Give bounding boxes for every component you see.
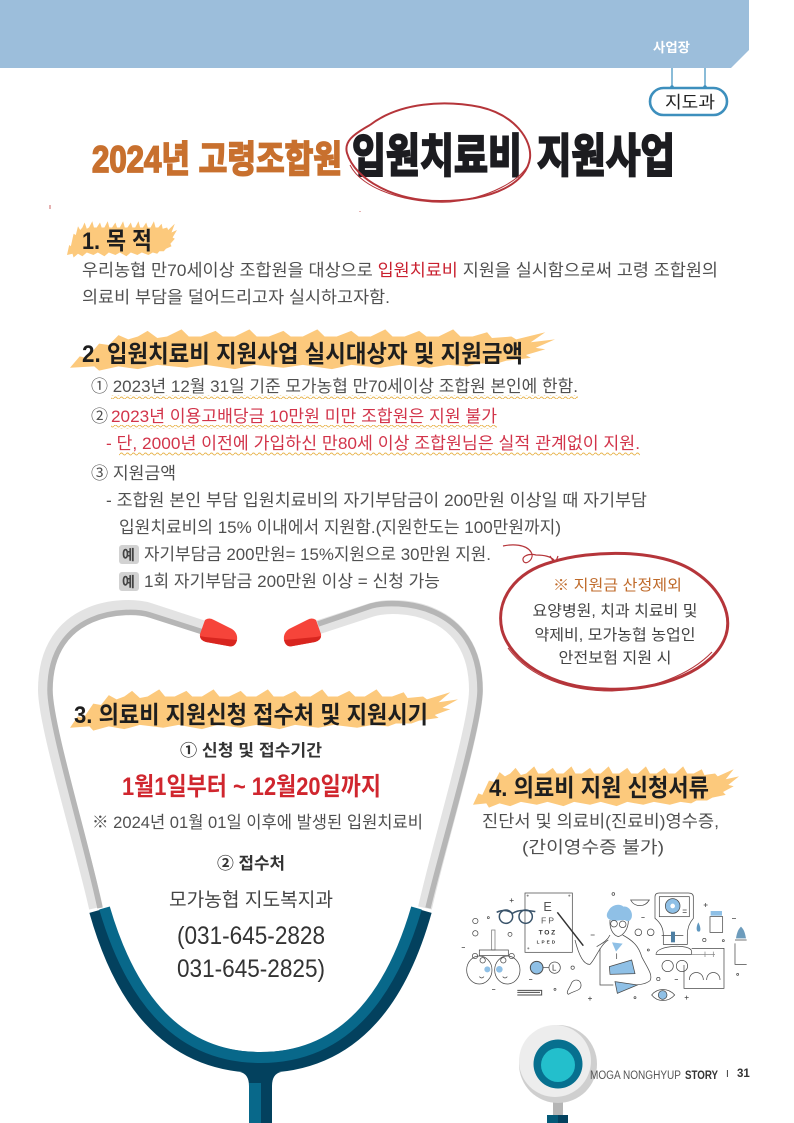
example 2: 1회 자기부담금 200만원 이상 = 신청 가능 <box>144 572 440 591</box>
section 4 heading <box>473 766 739 808</box>
section 1 body: 우리농협 만70세이상 조합원을 대상으로 입원치료비 지원을 실시함으로써 고령 조합원의 <box>82 261 718 280</box>
doctor <box>597 905 651 993</box>
example 1: 예 <box>122 547 135 563</box>
section 3 period: ① 신청 및 접수기간 <box>180 741 322 760</box>
example 2: 예 <box>122 574 135 590</box>
footer text: MOGA NONGHYUP <box>590 1070 681 1082</box>
title <box>92 130 675 182</box>
eye chart: TOZ <box>539 929 557 936</box>
illustration right part <box>597 893 747 1000</box>
section 4 heading: 4. 의료비 지원 신청서류 <box>489 775 709 802</box>
callout: exclusions: 안전보험 지원 시 <box>558 649 672 667</box>
section 4 body: 진단서 및 의료비(진료비)영수증, <box>482 812 719 831</box>
section 3 contact: (031-645-2828 <box>177 922 325 950</box>
lens icons: L <box>552 964 557 973</box>
magnifier decoration <box>519 1025 597 1123</box>
specks <box>50 205 360 212</box>
right ear tip <box>284 618 321 646</box>
eye chart: LPED <box>537 940 557 945</box>
left tube <box>45 607 205 908</box>
eye chart <box>525 893 583 952</box>
section 3 heading <box>70 689 458 731</box>
title: 2024년 고령조합원 <box>92 139 342 180</box>
department pill: 지도과 <box>665 93 715 112</box>
bottles, lens and drops <box>631 900 747 964</box>
section 1 heading <box>67 221 177 258</box>
item 3: ③ 지원금액 <box>91 464 176 483</box>
pointing arm <box>575 940 608 964</box>
banner label: 사업장 <box>653 40 690 55</box>
callout: exclusions <box>501 553 728 691</box>
title: 입원치료비 <box>352 130 522 182</box>
section 2 heading: 2. 입원치료비 지원사업 실시대상자 및 지원금액 <box>82 341 523 368</box>
title: 지원사업 <box>537 130 675 182</box>
item 3: 입원치료비의 15% 이내에서 지원함.(지원한도는 100만원까지) <box>119 518 561 537</box>
item 1: ① 2023년 12월 31일 기준 모가농협 만70세이상 조합원 본인에 한함. <box>91 377 578 396</box>
section 3 heading: 3. 의료비 지원신청 접수처 및 지원시기 <box>74 702 428 729</box>
section 1 body <box>82 261 718 307</box>
item 2: - 단, 2000년 이전에 가입하신 만80세 이상 조합원님은 실적 관계없이 지원. <box>106 434 640 453</box>
item 3: - 조합원 본인 부담 입원치료비의 자기부담금이 200만원 이상일 때 자기부담 <box>106 491 647 510</box>
section 2 heading <box>70 329 555 371</box>
section 1 body: 의료비 부담을 덜어드리고자 실시하고자함. <box>82 288 390 307</box>
section 4 body: (간이영수증 불가) <box>522 838 664 857</box>
callout: exclusions: 요양병원, 치과 치료비 및 <box>532 602 698 620</box>
section 3 contact: ② 접수처 <box>217 854 285 873</box>
right tube <box>316 604 480 908</box>
illustration left part <box>462 893 608 1001</box>
arrow to callout <box>503 545 558 564</box>
stethoscope <box>45 604 480 1123</box>
item 2: ② <box>91 407 108 426</box>
section 3 period: ※ 2024년 01월 01일 이후에 발생된 입원치료비 <box>92 813 423 832</box>
eye chart: E <box>543 900 552 914</box>
left ear tip <box>200 618 237 646</box>
section 3 contact: 031-645-2825) <box>177 955 325 983</box>
item 3 <box>91 464 647 537</box>
section 4 body <box>482 812 719 857</box>
section 1 heading: 1. 목 적 <box>82 228 152 255</box>
footer text: I <box>726 1069 729 1080</box>
department pill <box>650 68 727 115</box>
footer text: 31 <box>737 1068 750 1080</box>
eye chart: FP <box>541 916 556 926</box>
footer text: STORY <box>685 1070 718 1082</box>
chest tube <box>100 908 422 1062</box>
section 3 period: 1월1일부터 ~ 12월20일까지 <box>122 773 381 801</box>
footer text <box>590 1068 750 1082</box>
small marks <box>462 898 595 1001</box>
retinal scanner <box>655 893 693 954</box>
red hand-drawn circle around title <box>346 103 530 202</box>
lens icons <box>517 961 581 995</box>
section 3 contact <box>169 854 333 983</box>
section 3 period <box>92 741 423 832</box>
item 2: 2023년 이용고배당금 10만원 미만 조합원은 지원 불가 <box>111 407 497 426</box>
item 2 <box>91 407 640 456</box>
example 1: 자기부담금 200만원= 15%지원으로 30만원 지원. <box>144 545 491 564</box>
gauges, glasses and eye <box>652 948 724 1000</box>
glasses <box>497 910 535 923</box>
small marks <box>612 893 739 1000</box>
phoropter <box>467 930 520 984</box>
callout: exclusions: 약제비, 모가농협 농업인 <box>534 626 696 644</box>
illustration: eye doctor <box>462 893 747 1001</box>
stem <box>240 1072 281 1123</box>
section 3 contact: 모가농협 지도복지과 <box>169 889 333 911</box>
header banner <box>0 0 749 68</box>
section 2 items <box>91 377 647 591</box>
callout: exclusions: ※ 지원금 산정제외 <box>553 577 682 594</box>
